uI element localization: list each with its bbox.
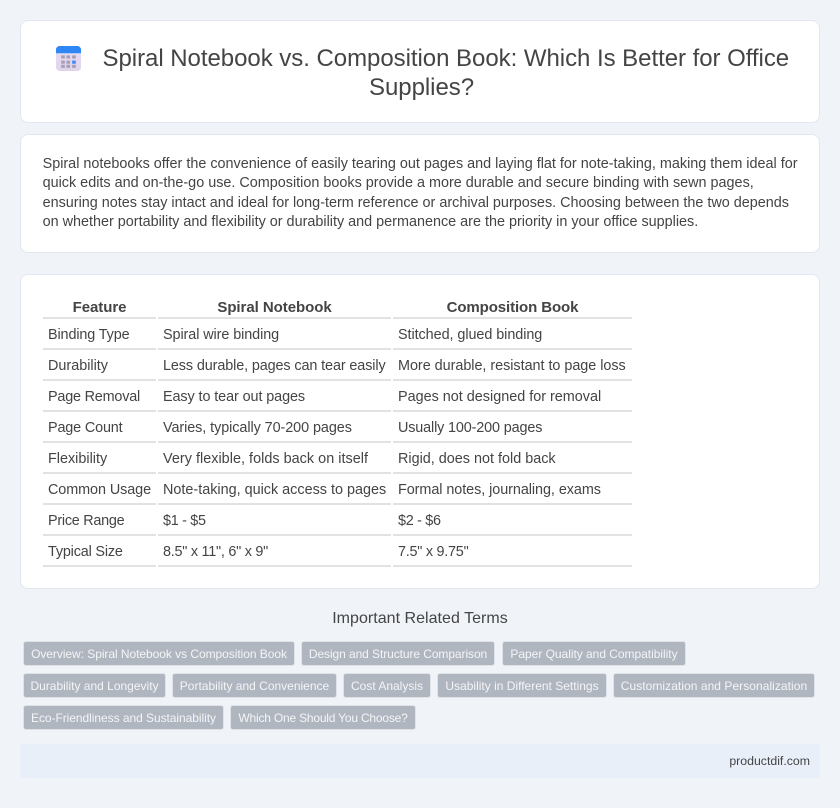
row: page count: Usually 100-200 pages xyxy=(398,420,542,436)
row: typical size: 8.5" x 11", 6" x 9" xyxy=(163,544,268,560)
panel: comparison table xyxy=(20,274,820,589)
row: flexibility: Very flexible, folds back on itself xyxy=(163,451,368,467)
row: common usage: Note-taking, quick access to pages xyxy=(163,482,386,498)
panel: intro text: on whether portability and flexibility or durability and permanence are the priority in your office supplies. xyxy=(43,214,698,230)
panel: intro text: quick edits and on-the-go use. Composition books provide a more durable and secure binding with sewn pages, xyxy=(43,175,754,191)
row: binding type: Stitched, glued binding xyxy=(398,327,542,343)
title xyxy=(102,45,789,101)
icon: calendar xyxy=(56,46,81,71)
related terms tags: Design and Structure Comparison xyxy=(309,647,487,661)
panel: intro text xyxy=(20,134,820,253)
row: typical size: Typical Size xyxy=(48,544,123,560)
panel: intro text: ensuring notes stay intact and ideal for long-term reference or archival purposes. Choosing between the two depends xyxy=(43,195,789,211)
related terms tags xyxy=(23,641,815,730)
row: common usage: Formal notes, journaling, exams xyxy=(398,482,601,498)
footer bar xyxy=(20,744,820,778)
row: page count: Page Count xyxy=(48,420,123,436)
footer source: productdif.com xyxy=(729,754,810,768)
title: Supplies? xyxy=(369,74,474,101)
row: page removal xyxy=(43,389,632,412)
heading: related terms: Important Related Terms xyxy=(332,610,508,627)
related terms tags: Which One Should You Choose? xyxy=(238,711,408,725)
row: binding type: Spiral wire binding xyxy=(163,327,279,343)
row: page count: Varies, typically 70-200 pages xyxy=(163,420,352,436)
table header: Spiral Notebook xyxy=(217,299,332,316)
related terms tags: Durability and Longevity xyxy=(30,679,159,693)
row: typical size: 7.5" x 9.75" xyxy=(398,544,468,560)
row: page count xyxy=(43,420,632,443)
row: price range: $1 - $5 xyxy=(163,513,206,529)
row: durability: More durable, resistant to page loss xyxy=(398,358,626,374)
row: price range xyxy=(43,513,632,536)
row: binding type: Binding Type xyxy=(48,327,130,343)
row: flexibility xyxy=(43,451,632,474)
row: binding type xyxy=(43,327,632,350)
panel: header xyxy=(20,20,820,123)
related terms tags: Paper Quality and Compatibility xyxy=(510,647,678,661)
row: durability: Less durable, pages can tear easily xyxy=(163,358,386,374)
title: Spiral Notebook vs. Composition Book: Which Is Better for Office xyxy=(102,45,789,72)
related terms tags: Eco-Friendliness and Sustainability xyxy=(31,711,216,725)
row: price range: $2 - $6 xyxy=(398,513,441,529)
row: page removal: Easy to tear out pages xyxy=(163,389,305,405)
row: page removal: Page Removal xyxy=(48,389,140,405)
related terms tags: Overview: Spiral Notebook vs Composition Book xyxy=(31,647,287,661)
row: durability: Durability xyxy=(48,358,108,374)
row: flexibility: Rigid, does not fold back xyxy=(398,451,556,467)
row: common usage xyxy=(43,482,632,505)
related terms tags: Portability and Convenience xyxy=(180,679,329,693)
row: durability xyxy=(43,358,632,381)
table header xyxy=(43,299,632,319)
row: typical size xyxy=(43,544,632,567)
row: flexibility: Flexibility xyxy=(48,451,107,467)
panel: intro text: Spiral notebooks offer the convenience of easily tearing out pages and laying flat for note-taking, making them ideal for xyxy=(43,156,798,172)
related terms tags: Usability in Different Settings xyxy=(445,679,599,693)
row: common usage: Common Usage xyxy=(48,482,151,498)
table header: Composition Book xyxy=(447,299,578,316)
table header: Feature xyxy=(73,299,126,316)
related terms tags: Cost Analysis xyxy=(351,679,423,693)
row: page removal: Pages not designed for removal xyxy=(398,389,601,405)
row: price range: Price Range xyxy=(48,513,124,529)
related terms tags: Customization and Personalization xyxy=(621,679,807,693)
